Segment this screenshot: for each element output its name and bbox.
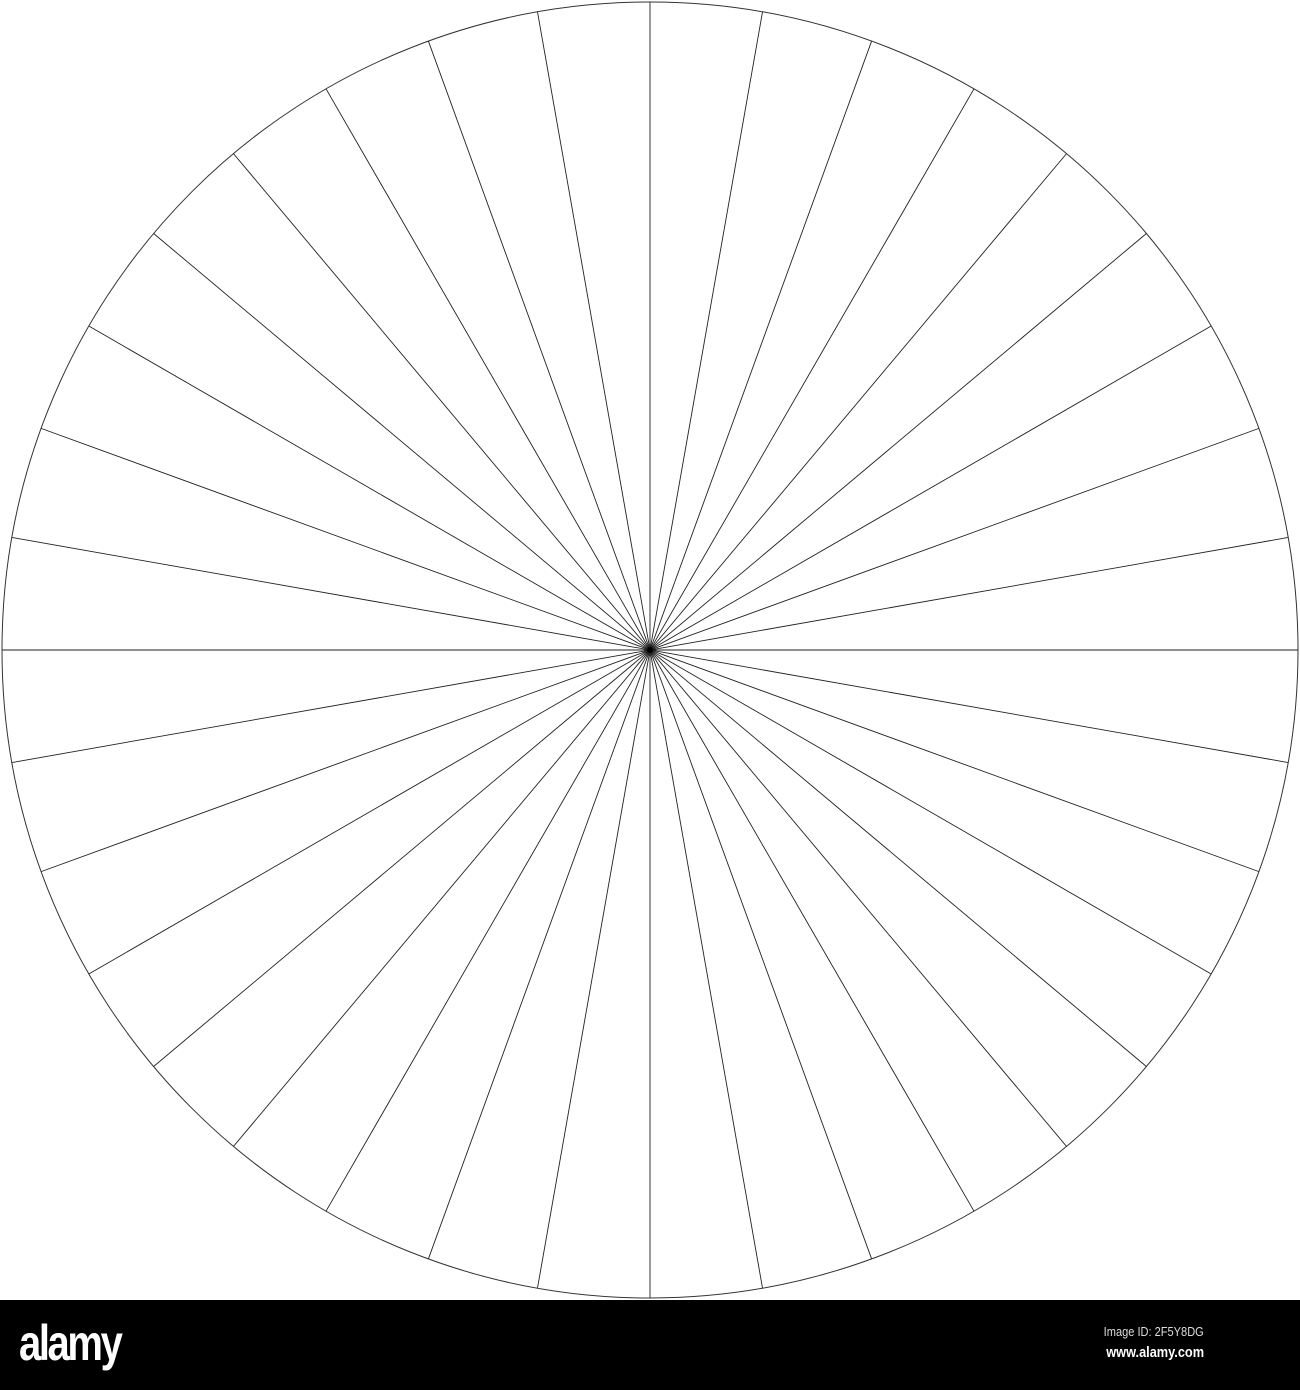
- website: www.alamy.com: [1106, 1344, 1204, 1361]
- image id: Image ID: 2F5Y8DG: [1104, 1324, 1204, 1339]
- center hub: [647, 647, 653, 653]
- logo: alamy: alamy: [19, 1315, 120, 1371]
- footer bar: [0, 1300, 1300, 1390]
